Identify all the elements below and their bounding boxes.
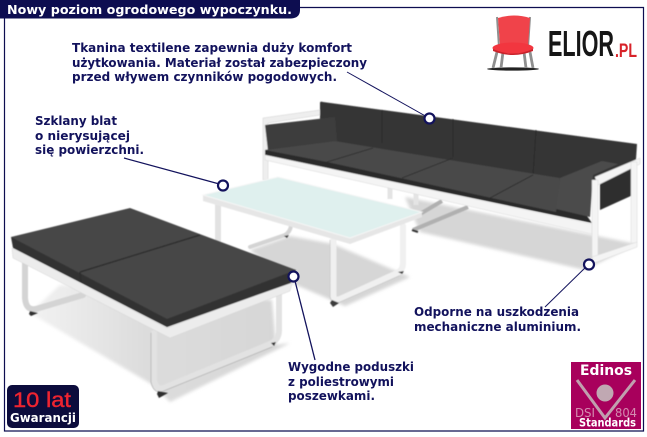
badge: 10 years warranty (7, 385, 79, 428)
table legs (218, 205, 403, 303)
callout: fabric: użytkowania. Materiał został zabezpieczony (72, 56, 367, 70)
badge: Edinos standards: 804 (615, 405, 637, 420)
logo: Elior.pl: .PL (615, 41, 637, 62)
callout: fabric: Tkanina textilene zapewnia duży komfort (72, 41, 352, 55)
callout: glass top: o nierysującej (35, 129, 130, 143)
badge: Edinos standards: Standards (579, 416, 636, 430)
badge: Edinos standards: DSI (575, 405, 595, 420)
lounge bench (11, 208, 296, 398)
callout: cushions (288, 272, 414, 403)
shadow: floor shadows (30, 197, 636, 402)
bench frame (12, 248, 293, 338)
sofa front frame (265, 155, 640, 263)
title banner: Nowy poziom ogrodowego wypoczynku. (7, 2, 292, 17)
sofa back frame (263, 110, 320, 180)
coffee table (203, 177, 422, 307)
icon: red chair (487, 16, 539, 71)
badge: 10 years warranty: Gwarancji (10, 410, 76, 425)
callout: glass top: Szklany blat (35, 114, 117, 128)
callout: fabric: przed wływem czynników pogodowych. (72, 70, 337, 84)
bench legs (25, 262, 279, 392)
sofa (263, 102, 640, 263)
table side edge (203, 195, 422, 244)
bench cushion seam (80, 235, 200, 282)
callout: fabric (72, 41, 434, 124)
table feet (284, 235, 404, 307)
sofa legs (390, 184, 468, 232)
callout: aluminium: Odporne na uszkodzenia (414, 305, 579, 319)
callout: aluminium: mechaniczne aluminium. (414, 320, 581, 334)
seat cushions (265, 141, 592, 223)
callout: glass top: się powierzchni. (35, 143, 144, 157)
callout: glass top (35, 114, 228, 190)
right arm cushion (556, 161, 618, 217)
right arm panel (600, 167, 635, 210)
bench cushion side (11, 237, 296, 327)
callout: cushions: z poliestrowymi (288, 375, 394, 389)
bench cushion top (11, 208, 296, 319)
callout: aluminium (414, 260, 594, 334)
sofa backrest (320, 102, 637, 190)
badge: Edinos standards: Edinos (580, 363, 632, 379)
glass top (203, 177, 422, 238)
logo: Elior.pl (487, 16, 637, 71)
badge: Edinos standards (571, 362, 641, 430)
callout: cushions: poszewkami. (288, 389, 375, 403)
left arm cushion (265, 117, 337, 151)
badge: 10 years warranty: 10 lat (13, 389, 71, 412)
bench feet (29, 311, 276, 398)
callout: cushions: Wygodne poduszki (288, 360, 414, 374)
